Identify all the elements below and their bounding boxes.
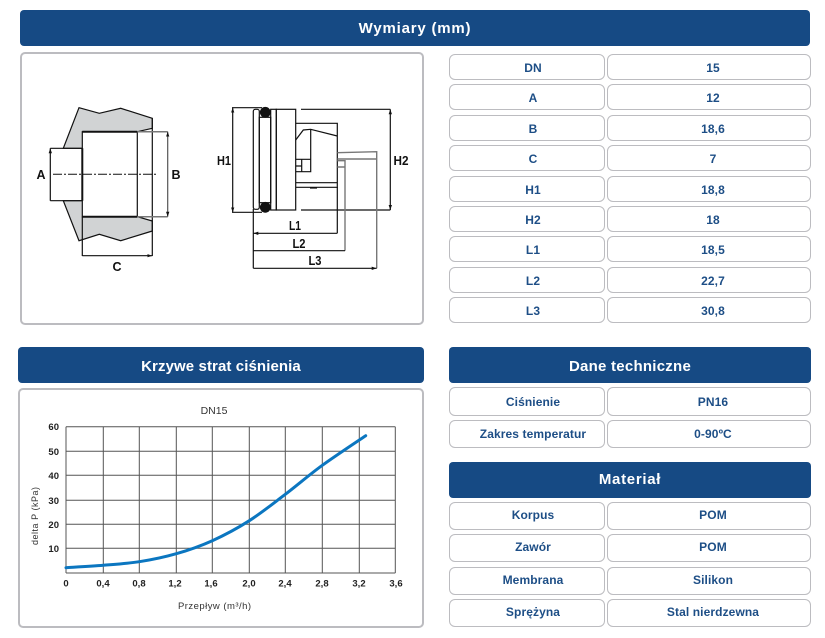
x axis ticks: 2,0 [242,578,256,590]
table: materials [449,502,811,627]
y axis ticks: 30 [48,496,59,507]
dimension labels H L: L3 [308,254,322,268]
table: materials: POM [699,540,727,554]
dimension labels A B C: A [36,168,46,182]
dimension labels A B C: B [171,168,181,182]
table: dimensions: 18,6 [701,122,725,136]
heading: Wymiary: Wymiary (mm) [359,20,471,36]
y axis ticks [48,422,59,555]
x axis ticks: 0 [63,578,69,590]
table: dimensions: C [529,152,537,166]
table: materials: Sprężyna [506,604,560,618]
table: dimensions: A [529,91,537,105]
x axis ticks: 1,2 [168,578,182,590]
table: materials: Korpus [512,508,554,522]
y axis ticks: 10 [48,544,59,555]
x axis ticks: 2,8 [315,578,329,590]
table: dimensions: L2 [526,274,540,288]
table: dimensions: 18,8 [701,183,725,197]
table: dimensions: 18,5 [701,243,725,257]
x axis ticks: 2,4 [278,578,292,590]
table: technical data: Zakres temperatur [480,427,586,441]
chart title: DN15 [201,405,228,417]
table: dimensions: 18 [706,213,720,227]
heading: Materiał [449,462,811,498]
heading: Dane techniczne: Dane techniczne [569,358,691,374]
table: technical data: 0-90ºC [694,427,732,441]
table: dimensions: 7 [710,152,716,166]
table: dimensions [449,54,811,323]
x axis ticks: 3,6 [389,578,403,590]
table: dimensions: 22,7 [701,274,725,288]
O-ring seals [260,107,271,213]
dimension labels A B C [36,168,181,274]
table: dimensions: 30,8 [701,304,725,318]
x axis ticks: 1,6 [204,578,218,590]
table: materials: Stal nierdzewna [667,604,759,618]
dimension labels H L: L2 [292,237,306,251]
table: dimensions: H2 [525,213,541,227]
body section bottom [63,201,152,241]
heading: Dane techniczne [449,347,811,383]
chart: pressure loss curve [30,405,403,612]
dimension labels H L: H1 [217,154,231,168]
table: materials: Membrana [503,572,563,586]
panel: chart background [18,388,424,628]
drawing: connector cross-section [36,108,181,274]
x axis ticks: 0,8 [132,578,146,590]
heading: Krzywe strat [18,347,424,383]
y axis title: delta P (kPa) [30,487,40,545]
drawing: valve side view [217,107,409,268]
y axis ticks: 40 [48,471,59,482]
table: dimensions: L1 [526,243,540,257]
table: technical data: PN16 [698,394,728,408]
table: dimensions: 12 [706,91,720,105]
dimension labels H L [217,154,409,268]
table: technical data: Ciśnienie [506,394,560,408]
heading: Materiał: Materiał [599,471,661,488]
dimension labels H L: L1 [289,219,301,233]
table: materials: Zawór [515,540,551,554]
table: technical data [449,387,811,448]
dimension labels A B C: C [112,260,122,274]
y axis ticks: 20 [48,520,59,531]
x axis ticks: 0,4 [96,578,110,590]
x axis ticks [63,578,403,590]
table: materials: Silikon [693,572,733,586]
table: dimensions: B [529,122,537,136]
grid [66,427,395,573]
table: dimensions: L3 [526,304,540,318]
x axis title: Przepływ (m³/h) [178,601,251,612]
y axis ticks: 60 [48,422,59,433]
dimension labels H L: H2 [394,154,409,168]
body section top [63,108,152,148]
table: dimensions: DN [524,61,542,75]
x axis ticks: 3,2 [352,578,366,590]
y axis ticks: 50 [48,447,59,458]
table: materials: POM [699,508,727,522]
table: dimensions: 15 [706,61,720,75]
panel: technical drawings [20,52,424,325]
heading: Wymiary [20,10,810,46]
curve [66,436,366,568]
heading: Krzywe strat: Krzywe strat ciśnienia [141,358,301,374]
table: dimensions: H1 [525,183,541,197]
